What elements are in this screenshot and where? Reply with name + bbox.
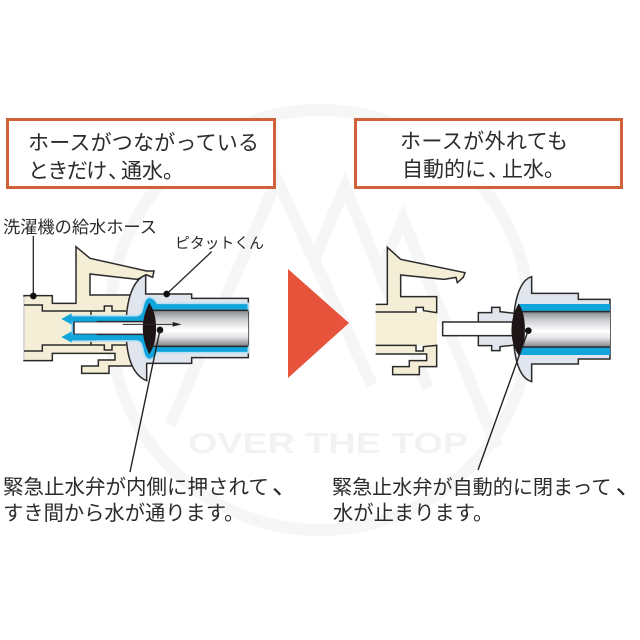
push arrow head [173, 322, 182, 327]
inner tube [519, 312, 610, 347]
leader dot pitatto [163, 291, 170, 297]
leader: valve right [478, 331, 528, 470]
label: hose: 洗濯機の給水ホース [3, 218, 157, 237]
valve [144, 304, 155, 353]
blue water channel [72, 297, 248, 359]
caption: left: 緊急止水弁が内側に押されて、 [3, 470, 299, 500]
blue channel top [518, 304, 610, 312]
leader lines [33, 236, 212, 296]
label: pitatto-kun: ピタットくん [175, 235, 264, 252]
push arrow [123, 323, 175, 326]
leader dot hose [30, 293, 37, 299]
caption: left: すき間から水が通ります。 [3, 502, 244, 525]
diagram: disconnected state [376, 247, 610, 382]
flow arrows [61, 313, 97, 325]
connector upper [376, 247, 465, 313]
tube edge lines [519, 312, 610, 347]
plug [478, 307, 515, 351]
leader: valve left [130, 330, 160, 472]
panel heading: disconnected: ホースが外れても [400, 130, 568, 154]
plug pin [443, 322, 514, 336]
caption: right: 水が止まります。 [333, 502, 493, 525]
panel heading: disconnected: 自動的に [402, 158, 486, 182]
connector inner lines [24, 305, 126, 351]
arrow: state change [288, 269, 349, 378]
panel heading: connected: ホースがつながっている [28, 132, 259, 155]
flange and tube [513, 277, 610, 382]
connector body [376, 312, 437, 345]
tube edge lines [153, 310, 248, 346]
mask left open edge [23, 297, 25, 360]
cream connector [24, 247, 154, 373]
leader dot [525, 327, 532, 334]
panel heading: disconnected: 止水。 [502, 158, 565, 182]
nozzle [74, 322, 145, 334]
inner tube [152, 311, 248, 346]
panel heading: disconnected [356, 120, 622, 188]
panel heading: connected: 、 [108, 160, 129, 183]
watermark: over the top logo [110, 110, 530, 530]
leader dot valve [157, 327, 163, 333]
valve [512, 305, 524, 354]
blue channel bottom [519, 347, 610, 355]
connector lower [376, 345, 437, 375]
panel heading: disconnected: 、 [488, 158, 509, 182]
panel heading: connected: 通水。 [121, 160, 184, 183]
caption: right: 緊急止水弁が自動的に閉まって、 [332, 470, 640, 500]
caption: left [3, 470, 299, 525]
watermark: over the top logo: OVER THE TOP [188, 428, 468, 460]
flange [126, 275, 248, 381]
panel heading: connected [8, 120, 274, 188]
flow arrow lower [61, 331, 97, 343]
diagram: connected state [23, 236, 248, 381]
caption: right [332, 470, 640, 525]
panel heading: connected: ときだけ [28, 160, 106, 183]
